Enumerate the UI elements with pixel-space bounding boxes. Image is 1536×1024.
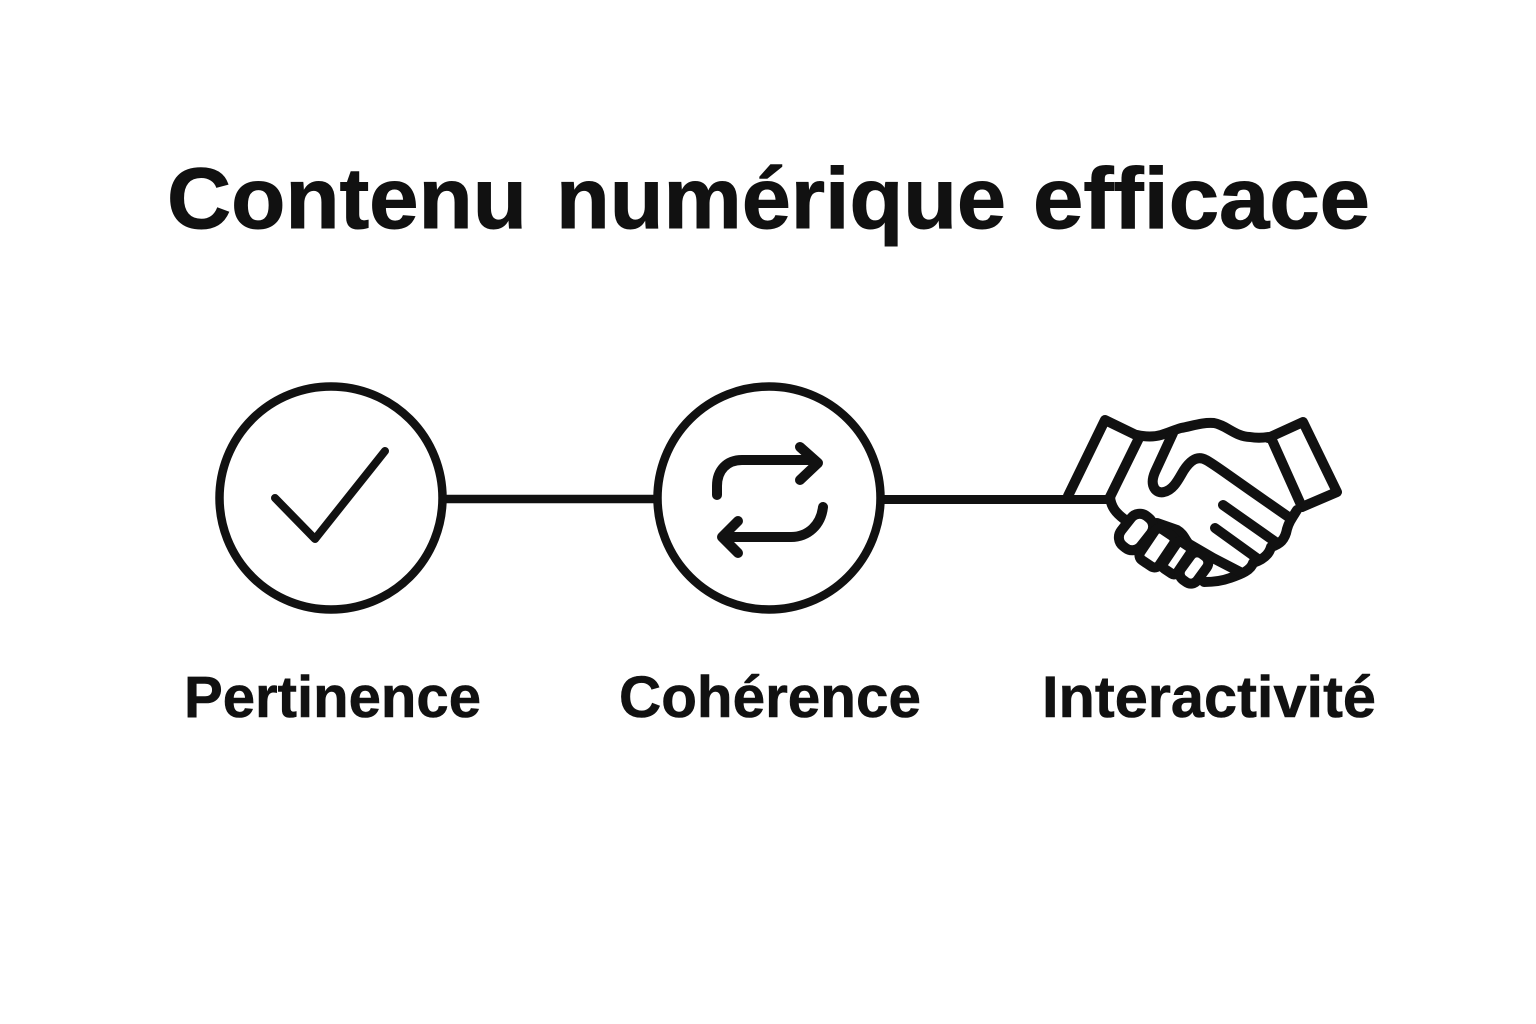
- title: numérique: [556, 151, 1006, 247]
- thumb and upper hand: [1153, 433, 1290, 518]
- icon: check mark in circle: [220, 386, 442, 610]
- label: Pertinence: Pertinence: [184, 665, 481, 730]
- title: [167, 151, 1370, 247]
- top contour of hands: [1137, 423, 1268, 438]
- icon: handshake: [1068, 420, 1337, 587]
- label: Cohérence: Cohérence: [619, 665, 921, 730]
- connector: cohérence to interactivité: [882, 495, 1112, 504]
- upper edge of knuckles: [1157, 523, 1240, 572]
- connector: pertinence to cohérence: [445, 495, 657, 503]
- fingers: [1223, 505, 1277, 543]
- left hand edge: [1110, 497, 1124, 519]
- left cuff: [1068, 420, 1139, 497]
- icon: cycle arrows in circle: [658, 386, 880, 610]
- title: efficace: [1033, 151, 1370, 247]
- lower right edge of hand: [1204, 510, 1297, 582]
- knuckles: [1114, 509, 1158, 555]
- title: Contenu: [167, 151, 527, 247]
- label: Interactivité: Interactivité: [1042, 665, 1376, 730]
- right cuff: [1268, 422, 1337, 507]
